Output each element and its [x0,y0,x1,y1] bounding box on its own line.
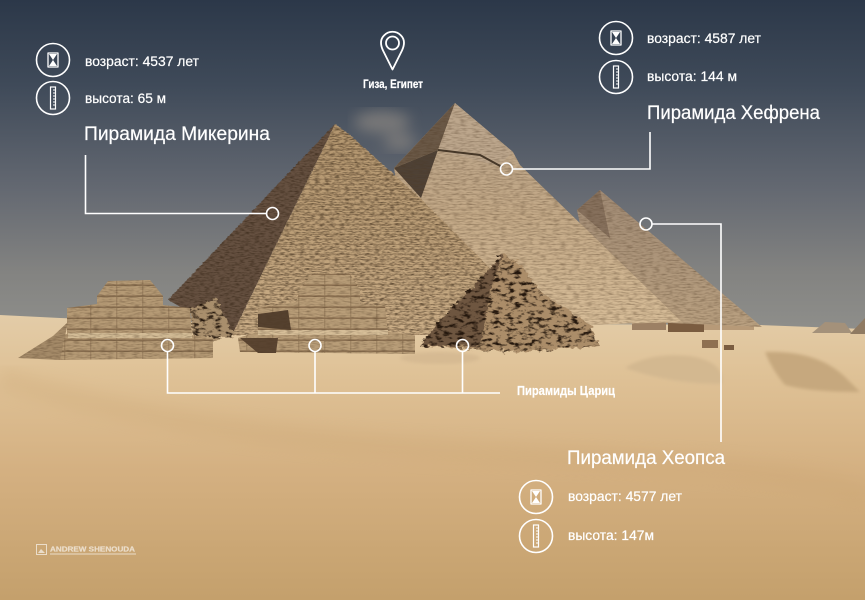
heading: Пирамида Хефрена [647,103,820,124]
background: sky [0,0,865,340]
icon: photo [36,544,46,554]
heading: Пирамида Микерина [84,124,270,145]
age text: возраст: 4577 лет [568,489,682,504]
age text: возраст: 4587 лет [647,31,761,46]
location marker [363,32,423,91]
icon: hourglass [36,44,70,76]
panel: Микерина [36,44,270,145]
pyramid: far right (Хеопса) [577,190,762,327]
label: Пирамиды Цариц: Пирамиды Цариц [517,383,615,398]
rubble between pyramids [190,298,235,340]
height text: высота: 144 м [647,69,737,84]
clouds [354,111,416,150]
queens pyramid: right [420,253,600,352]
icon: map pin [381,32,404,70]
queens pyramid: middle [238,274,415,354]
photo credit [36,544,136,554]
location text: Гиза, Египет [363,79,423,91]
leader line: Хефрена [500,132,650,175]
leader line: Микерина [86,155,278,220]
leader line: Хеопса [640,218,721,442]
leader lines: Пирамиды Цариц [162,340,500,393]
pyramid: middle (Хефрена) [394,103,682,330]
panel: Хеопса [520,448,725,552]
distant ruins [632,318,865,350]
icon: ruler [520,520,552,552]
heading: Пирамида Хеопса [567,448,725,469]
icon: hourglass [520,480,552,514]
panel: Хефрена [600,22,820,124]
icon: ruler [36,82,70,114]
credit text: ANDREW SHENOUDA [50,544,136,554]
height text: высота: 147м [568,528,654,543]
age text: возраст: 4537 лет [85,54,199,69]
icon: ruler [600,60,632,94]
queens pyramid: left [18,280,213,360]
height text: высота: 65 м [85,91,166,106]
pyramid: front (Микерина) [168,124,500,335]
icon: hourglass [600,22,632,54]
background: desert sand [0,315,865,600]
